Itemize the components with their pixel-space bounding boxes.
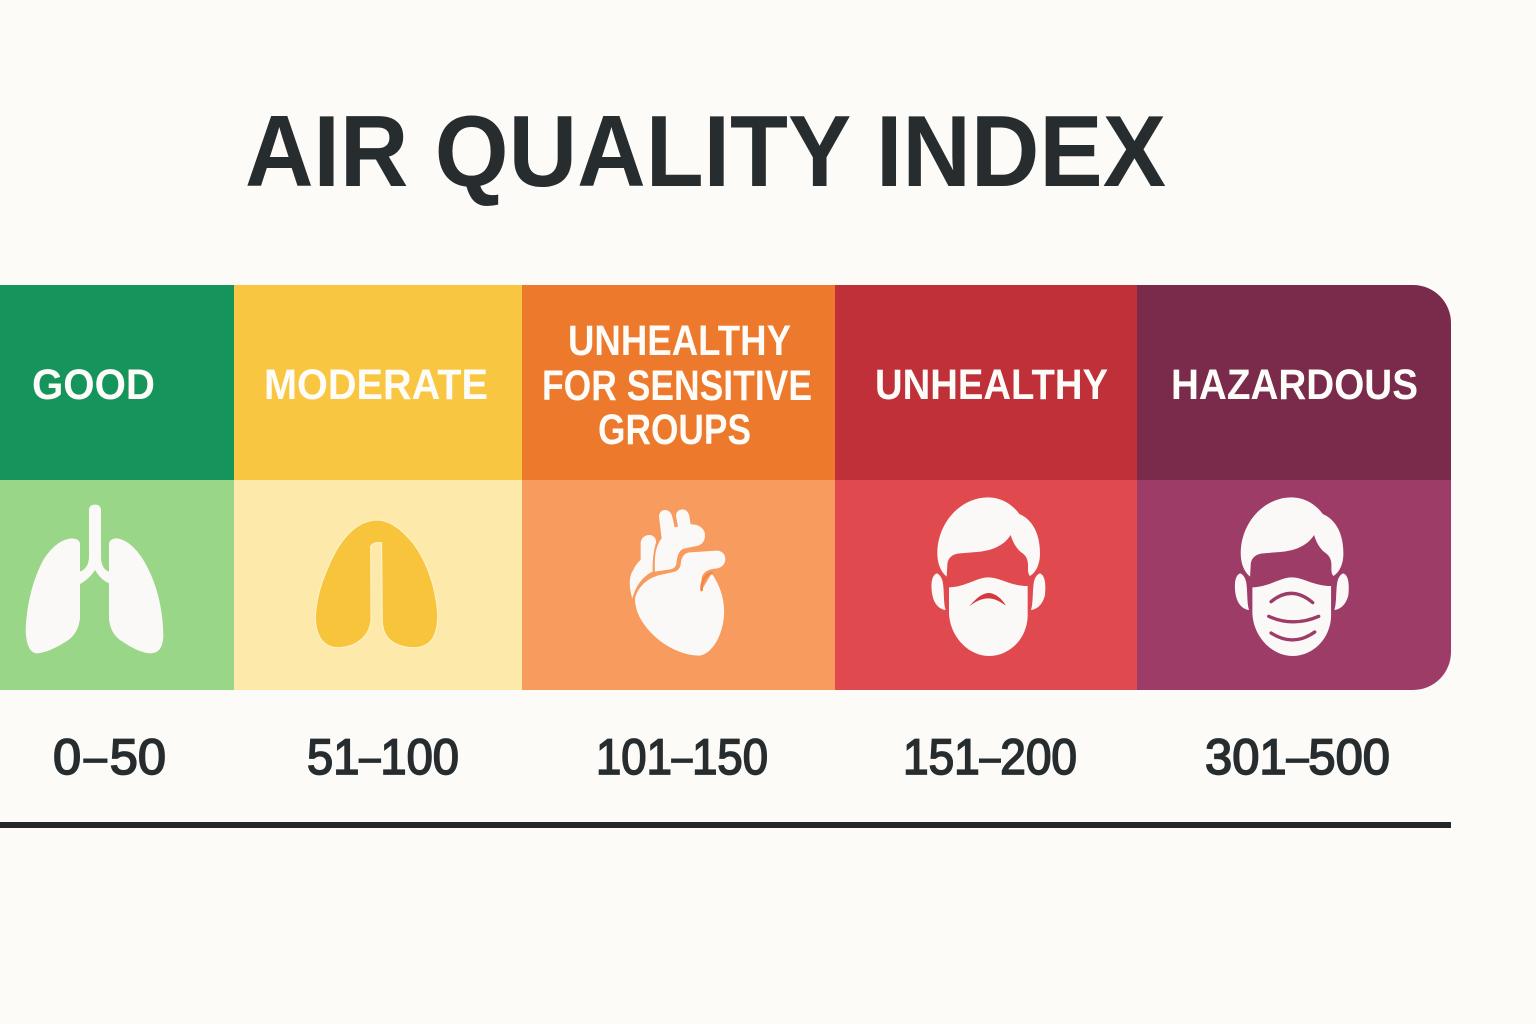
header band: moderate xyxy=(234,285,522,480)
panel: good xyxy=(0,285,234,690)
range: 0-50: 50 xyxy=(110,729,166,785)
header band: good xyxy=(0,285,234,480)
panel: unhealthy for sensitive groups xyxy=(522,285,835,690)
range: 151-200: 200 xyxy=(1000,729,1077,785)
icon: face with pleated mask xyxy=(1235,497,1349,656)
panel: moderate xyxy=(234,285,522,690)
label: unhealthy for sensitive groups: GROUPS xyxy=(598,406,751,454)
range: 301-500: 500 xyxy=(1308,729,1390,785)
label: moderate: MODERATE xyxy=(264,361,488,409)
range: 151-200: – xyxy=(980,736,1001,780)
icon: heart xyxy=(630,509,725,656)
icon band: hazardous xyxy=(1137,480,1451,690)
icon: yellow lungs xyxy=(315,520,438,648)
icon band: moderate xyxy=(234,480,522,690)
range: 101-150: – xyxy=(672,736,693,780)
range: 51-100: – xyxy=(359,736,381,780)
label: unhealthy: UNHEALTHY xyxy=(875,361,1108,409)
baseline rule xyxy=(0,822,1451,828)
header band: sensitive groups xyxy=(522,285,835,480)
icon band: good xyxy=(0,480,234,690)
range: 51-100: 100 xyxy=(380,729,459,785)
header band: hazardous xyxy=(1137,285,1451,480)
header band: unhealthy xyxy=(835,285,1137,480)
label: unhealthy for sensitive groups: UNHEALTHY xyxy=(568,317,791,365)
label: hazardous: HAZARDOUS xyxy=(1171,361,1418,409)
range: 101-150: 101 xyxy=(596,729,679,785)
panel: hazardous xyxy=(1137,285,1451,690)
range: 301-500: 301 xyxy=(1205,729,1288,785)
title: AIR QUALITY INDEX xyxy=(245,96,1166,208)
range: 101-150: 150 xyxy=(692,729,768,785)
range: 151-200: 151 xyxy=(903,729,986,785)
panel: unhealthy xyxy=(835,285,1137,690)
icon band: unhealthy xyxy=(835,480,1137,690)
icon: white lungs xyxy=(26,505,163,653)
icon band: sensitive groups xyxy=(522,480,835,690)
range: 0-50: – xyxy=(84,736,107,780)
range: 301-500: – xyxy=(1287,736,1309,780)
range: 0-50: 0 xyxy=(53,729,81,785)
label: unhealthy for sensitive groups: FOR SENSITIVE xyxy=(542,362,812,410)
label: unhealthy for sensitive groups xyxy=(542,317,812,454)
icon: face with mask xyxy=(932,497,1045,656)
label: good: GOOD xyxy=(32,361,155,409)
range: 51-100: 51 xyxy=(307,729,363,785)
